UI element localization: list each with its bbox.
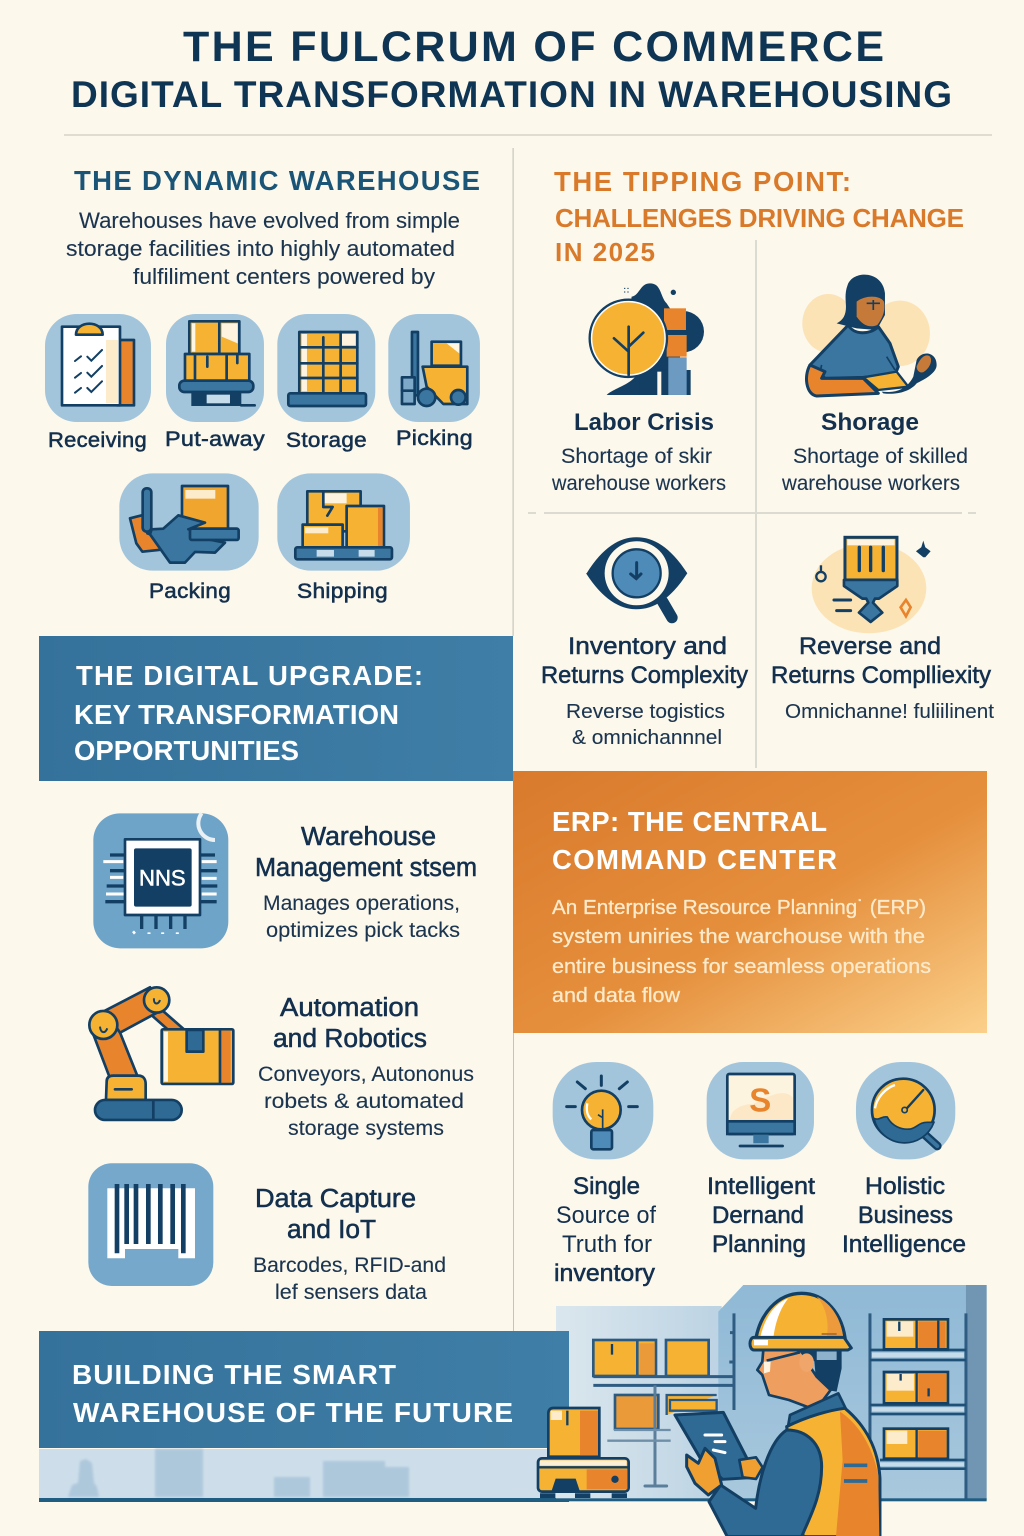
- panel: building the smart warehouse banner: WAREHOUSE OF THE FUTURE: [73, 1397, 513, 1428]
- panel: erp central command center: [513, 771, 987, 1033]
- icon: receiving: [45, 314, 151, 422]
- label: holistic business intelligence: [842, 1173, 966, 1258]
- scene: background wall panels: [556, 1285, 987, 1500]
- panel: erp central command center: entire business for seamless operations: [552, 956, 931, 978]
- description: storage systems: [288, 1117, 444, 1140]
- panel: erp central command center: COMMAND CENTER: [552, 844, 837, 875]
- panel: the digital upgrade banner: OPPORTUNITIES: [74, 735, 299, 766]
- strip: faded warehouse silhouettes: [39, 1449, 569, 1502]
- label: holistic business intelligence: Business: [858, 1202, 953, 1229]
- item: holistic business intelligence: [842, 1062, 966, 1258]
- icon labels: Shipping: [297, 579, 388, 603]
- card: shorage: [781, 275, 968, 495]
- scene: hard hat: [750, 1293, 851, 1350]
- icon: shipping: [277, 473, 410, 571]
- heading: data capture and iot: [255, 1185, 416, 1244]
- icon labels: Picking: [396, 426, 473, 450]
- text: shorage: Shorage: [821, 409, 919, 436]
- description: Conveyors, Autononus: [258, 1063, 474, 1086]
- heading: data capture and iot: and IoT: [287, 1216, 376, 1244]
- description: lef sensers data: [275, 1281, 427, 1304]
- title: THE FULCRUM OF COMMERCE: [183, 23, 884, 71]
- description: optimizes pick tacks: [266, 919, 460, 942]
- description: [258, 1063, 474, 1140]
- label: single source of truth: Source of: [556, 1202, 656, 1229]
- label: single source of truth: Truth for: [562, 1231, 652, 1258]
- icon: reverse logistics brush: [812, 537, 931, 633]
- description: robets & automated: [264, 1090, 464, 1113]
- illustration: smart warehouse scene: [527, 1293, 987, 1536]
- heading: the tipping point: CHALLENGES DRIVING CHANGE: [555, 203, 964, 233]
- title: [71, 23, 952, 115]
- icon: worker shortage: [802, 275, 937, 396]
- panel: the digital upgrade banner: THE DIGITAL UPGRADE:: [76, 660, 423, 691]
- text: inventory and returns complexity: Returns Complexity: [541, 662, 749, 689]
- heading: warehouse management: Warehouse: [301, 823, 436, 851]
- heading: warehouse management: [255, 823, 477, 882]
- icon: monitor: [707, 1062, 814, 1159]
- item: single source of truth: [553, 1062, 656, 1287]
- heading: the tipping point: THE TIPPING POINT:: [554, 166, 851, 197]
- icon: monitor: S: [749, 1082, 771, 1119]
- item: intelligent demand planning: [707, 1062, 815, 1258]
- description: [566, 700, 725, 749]
- icon: gauge magnifier: [856, 1062, 955, 1159]
- icon labels: Put-away: [165, 427, 265, 451]
- description: Omnichanne! fuliilinent: [785, 700, 994, 723]
- icon: labor crisis: [590, 283, 704, 395]
- icon: light bulb: [553, 1062, 653, 1159]
- panel: erp central command center: system uniries the warchouse with the: [552, 926, 925, 948]
- description: Shortage of skir: [561, 445, 712, 468]
- description: [253, 1254, 446, 1304]
- item: warehouse management system: [93, 813, 477, 948]
- icon: wms chip: [93, 813, 228, 948]
- icon: robot arm: [89, 987, 233, 1120]
- heading: automation and robotics: [273, 994, 427, 1053]
- text: reverse and returns complexity: [771, 633, 992, 689]
- label: intelligent demand planning: Dernand: [712, 1202, 804, 1229]
- panel: the dynamic warehouse: [45, 165, 480, 603]
- text: inventory and returns complexity: Inventory and: [568, 633, 727, 660]
- icon labels: Storage: [286, 428, 367, 452]
- scene: agv robot carrying box: [538, 1408, 629, 1498]
- item: automation and robotics: [89, 987, 474, 1140]
- label: holistic business intelligence: Holistic: [865, 1173, 945, 1200]
- text block: warehouse intro: storage facilities into highly automated: [66, 236, 455, 261]
- card: inventory and returns complexity: [541, 537, 749, 749]
- icon: eye and magnifier: [586, 537, 687, 618]
- scene: right shelving with boxes: [870, 1313, 966, 1500]
- label: single source of truth: inventory: [554, 1260, 655, 1287]
- description: [551, 445, 726, 495]
- icon: storage: [277, 314, 375, 422]
- label: intelligent demand planning: Intelligent: [707, 1173, 815, 1200]
- item: data capture and iot: [88, 1163, 446, 1304]
- heading: data capture and iot: Data Capture: [255, 1185, 416, 1213]
- text: labor crisis: Labor Crisis: [574, 409, 714, 436]
- text block: warehouse intro: Warehouses have evolved from simple: [79, 208, 460, 233]
- description: warehouse workers: [781, 472, 960, 495]
- panel: the digital upgrade banner: [39, 636, 513, 781]
- scene: worker with tablet: [675, 1348, 880, 1536]
- icon: put-away: [166, 314, 264, 422]
- text: reverse and returns complexity: Reverse and: [799, 633, 941, 660]
- scene: floor line: [527, 1498, 987, 1501]
- description: Barcodes, RFID-and: [253, 1254, 446, 1277]
- text block: warehouse intro: [66, 208, 460, 289]
- label: intelligent demand planning: [707, 1173, 815, 1258]
- label: intelligent demand planning: Planning: [712, 1231, 806, 1258]
- description: Manages operations,: [263, 892, 460, 915]
- icon labels: Packing: [149, 579, 231, 603]
- text: inventory and returns complexity: [541, 633, 749, 689]
- panel: erp central command center: ERP: THE CENTRAL: [552, 806, 827, 837]
- description: [781, 445, 968, 495]
- text block: warehouse intro: fulfiliment centers powered by: [133, 264, 435, 289]
- label: single source of truth: Single: [573, 1173, 640, 1200]
- icon labels: [48, 426, 473, 603]
- heading: the dynamic warehouse: THE DYNAMIC WAREHOUSE: [74, 165, 480, 196]
- icon: wms chip: NNS: [139, 865, 186, 890]
- icon: barcode: [88, 1163, 213, 1286]
- label: holistic business intelligence: Intelligence: [842, 1231, 966, 1258]
- heading: the tipping point: [554, 166, 964, 267]
- label: single source of truth: [554, 1173, 656, 1287]
- scene: left shelving: [593, 1313, 735, 1486]
- heading: the tipping point: IN 2025: [555, 237, 655, 267]
- panel: erp central command center: and data flow: [552, 985, 681, 1007]
- icon: packing: [119, 473, 259, 571]
- heading: automation and robotics: and Robotics: [273, 1025, 427, 1053]
- title: DIGITAL TRANSFORMATION IN WAREHOUSING: [71, 74, 952, 115]
- panel: the digital upgrade banner: KEY TRANSFORMATION: [74, 699, 399, 730]
- heading: automation and robotics: Automation: [280, 994, 419, 1022]
- panel: erp central command center: An Enterprise Resource Planning˙ (ERP): [552, 897, 926, 919]
- description: [263, 892, 460, 942]
- icon labels: Receiving: [48, 428, 147, 452]
- description: & omnichannnel: [572, 726, 722, 749]
- description: Shortage of skilled: [793, 445, 968, 468]
- text: reverse and returns complexity: Returns Complliexity: [771, 662, 992, 689]
- panel: building the smart warehouse banner: BUILDING THE SMART: [72, 1359, 396, 1390]
- card: reverse and returns complexity: [771, 537, 994, 723]
- panel: building the smart warehouse banner: [39, 1331, 569, 1448]
- description: warehouse workers: [551, 472, 726, 495]
- icon: picking: [388, 314, 480, 422]
- heading: warehouse management: Management stsem: [255, 854, 477, 882]
- card: labor crisis: [551, 283, 726, 495]
- description: Reverse togistics: [566, 700, 725, 723]
